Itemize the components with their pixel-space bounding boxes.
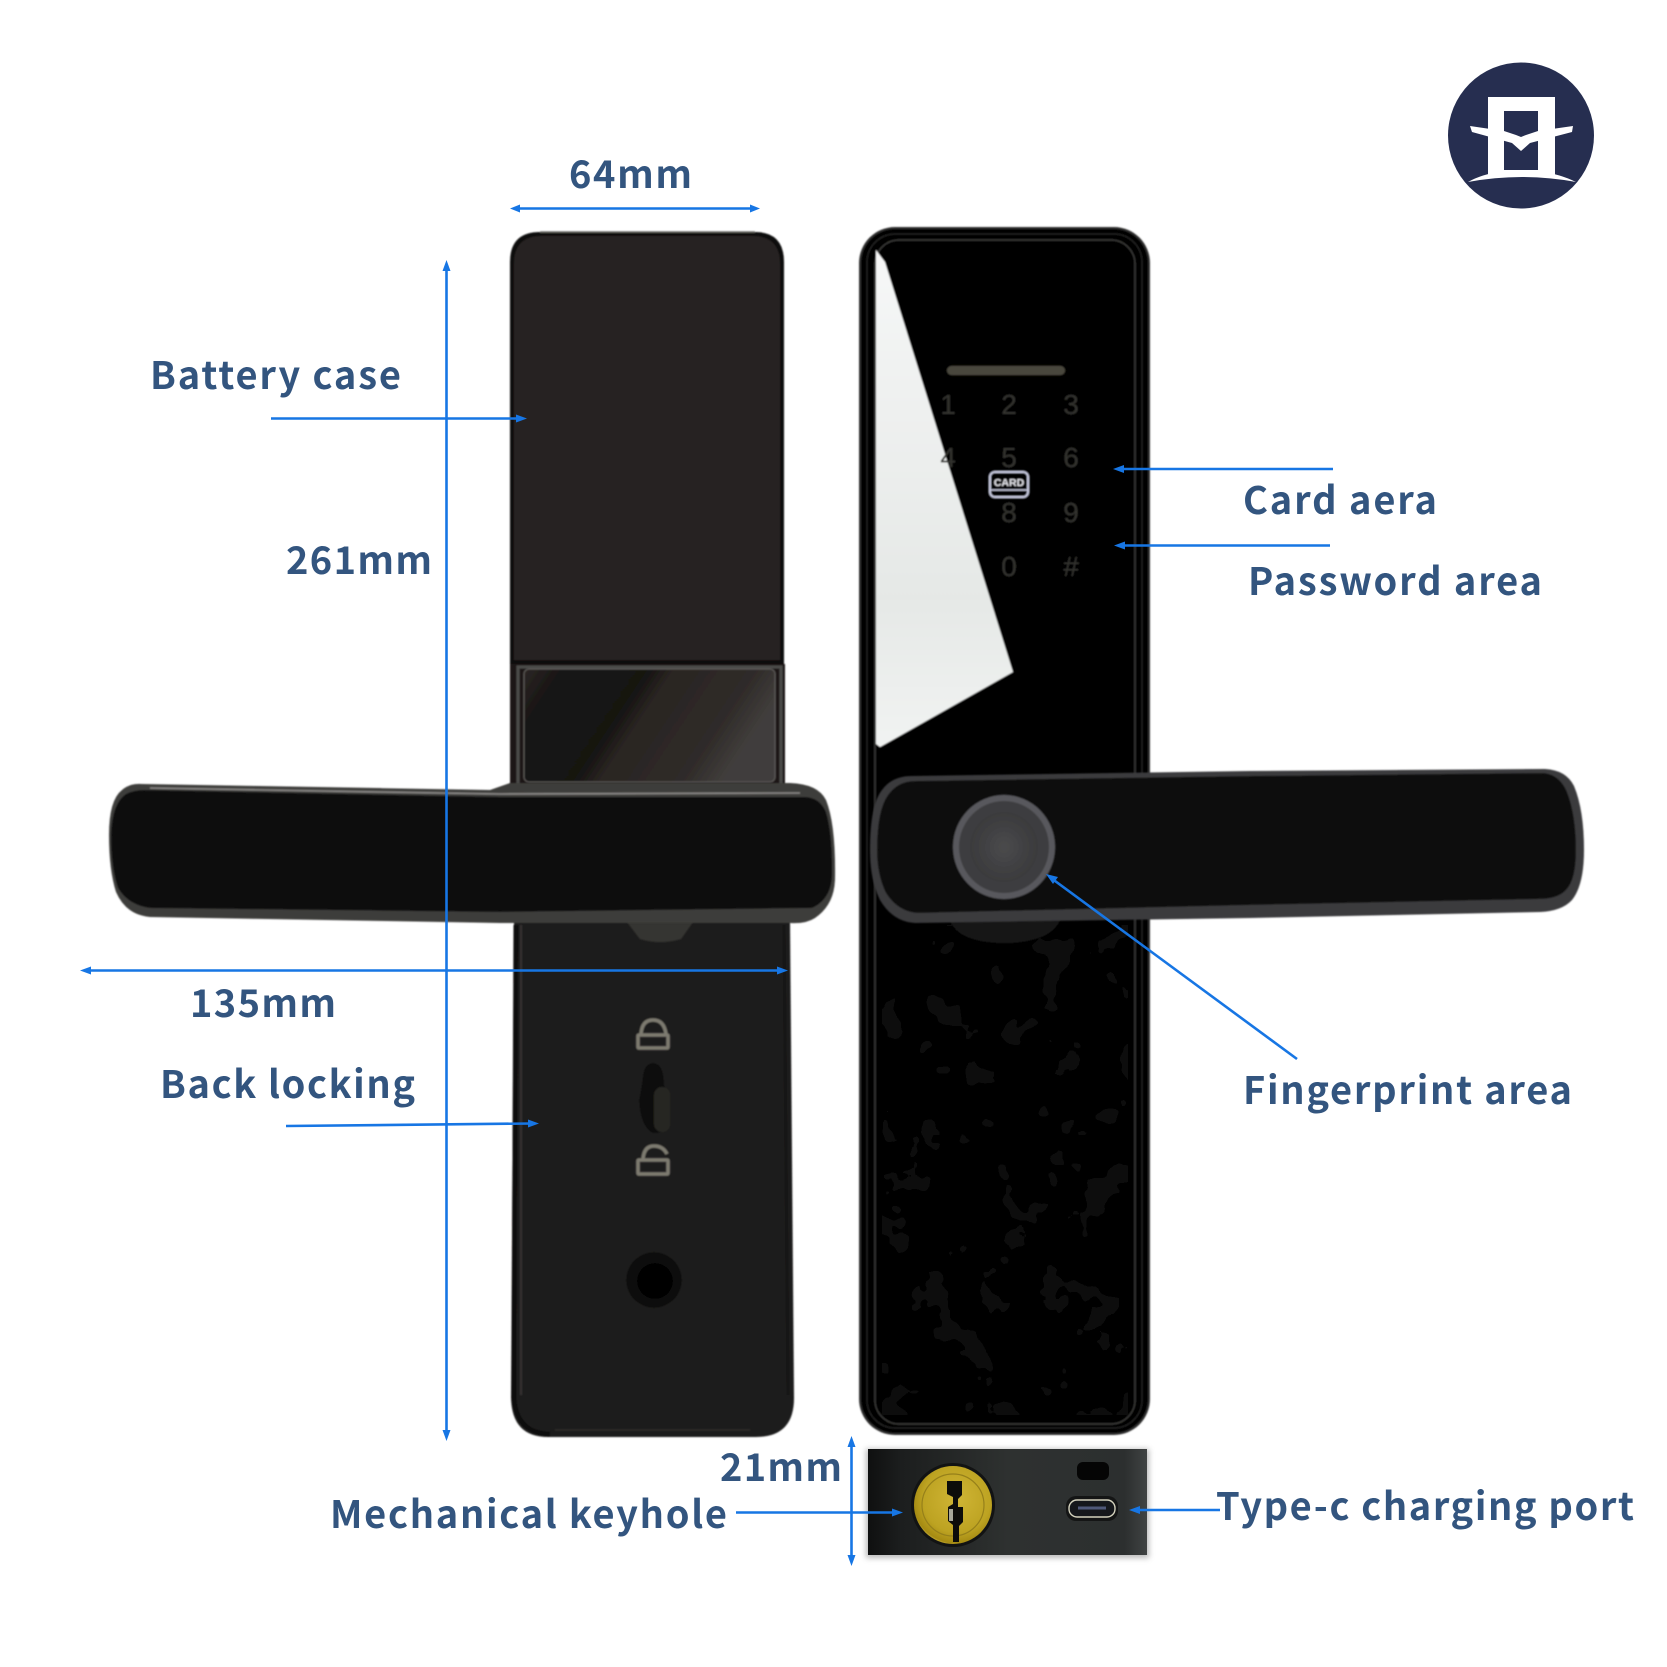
keypad digits: 5 [1001, 442, 1017, 473]
icon: locked padlock [638, 1020, 668, 1048]
label: 135mm: 135mm [190, 973, 336, 1028]
arrow: password area [1114, 542, 1330, 550]
keypad digits: 4 [940, 442, 956, 473]
label: type-c charging port: Type-c charging port [1216, 1476, 1634, 1531]
icon: unlocked padlock [638, 1146, 668, 1174]
arrow: mechanical keyhole [736, 1508, 903, 1516]
label: battery case: Battery case [150, 345, 401, 400]
label: 21mm: 21mm [720, 1437, 842, 1492]
keypad digits [940, 389, 1079, 582]
arrow: fingerprint area [1046, 874, 1297, 1059]
keypad digits: 6 [1063, 442, 1079, 473]
fingerprint sensor [953, 795, 1055, 899]
arrow: card area [1113, 465, 1333, 473]
mottled texture [882, 925, 1128, 1415]
screw hole [626, 1252, 682, 1308]
battery case cover [510, 232, 784, 664]
left lock: back panel [510, 232, 794, 1437]
type-c port [1066, 1496, 1118, 1521]
label: fingerprint area: Fingerprint area [1243, 1060, 1572, 1115]
label: 261mm: 261mm [286, 530, 432, 585]
label: password area: Password area [1248, 551, 1542, 606]
arrow: type-c port [1129, 1506, 1220, 1514]
arrow: battery case [271, 414, 527, 422]
bottom faceplate [866, 1449, 1149, 1558]
screen reflection [876, 250, 1013, 747]
arrow: 64mm width [510, 204, 760, 212]
keypad digits: 3 [1063, 389, 1079, 420]
label: mechanical keyhole: Mechanical keyhole [330, 1484, 727, 1539]
keypad digits: 8 [1001, 497, 1017, 528]
keypad digits: 1 [940, 389, 956, 420]
card icon: CARD [994, 477, 1025, 489]
right lock: fingerprint handle [870, 769, 1584, 923]
arrow: 21mm thickness [848, 1436, 856, 1566]
arrow: 261mm height [442, 260, 450, 1441]
keypad digits: 0 [1001, 551, 1017, 582]
small reset slot [1077, 1462, 1109, 1480]
keypad digits: # [1063, 551, 1079, 582]
logo [1448, 62, 1594, 208]
label: 64mm: 64mm [569, 144, 692, 199]
card icon [990, 472, 1028, 497]
keypad digits: 9 [1063, 497, 1079, 528]
back locking slider [639, 1063, 670, 1133]
spindle neck under handle [950, 920, 1060, 943]
arrow: back locking [286, 1120, 539, 1128]
middle glossy section [510, 664, 785, 786]
arrow: 135mm width [80, 966, 788, 974]
lower back plate [511, 920, 794, 1437]
keypad digits: 2 [1001, 389, 1017, 420]
label: card area: Card aera [1243, 470, 1437, 525]
LED status bar [947, 366, 1065, 375]
right lock: front panel [859, 227, 1150, 1435]
label: back locking: Back locking [160, 1054, 415, 1109]
left lock: handle [109, 783, 835, 923]
mechanical key cylinder [911, 1463, 995, 1547]
